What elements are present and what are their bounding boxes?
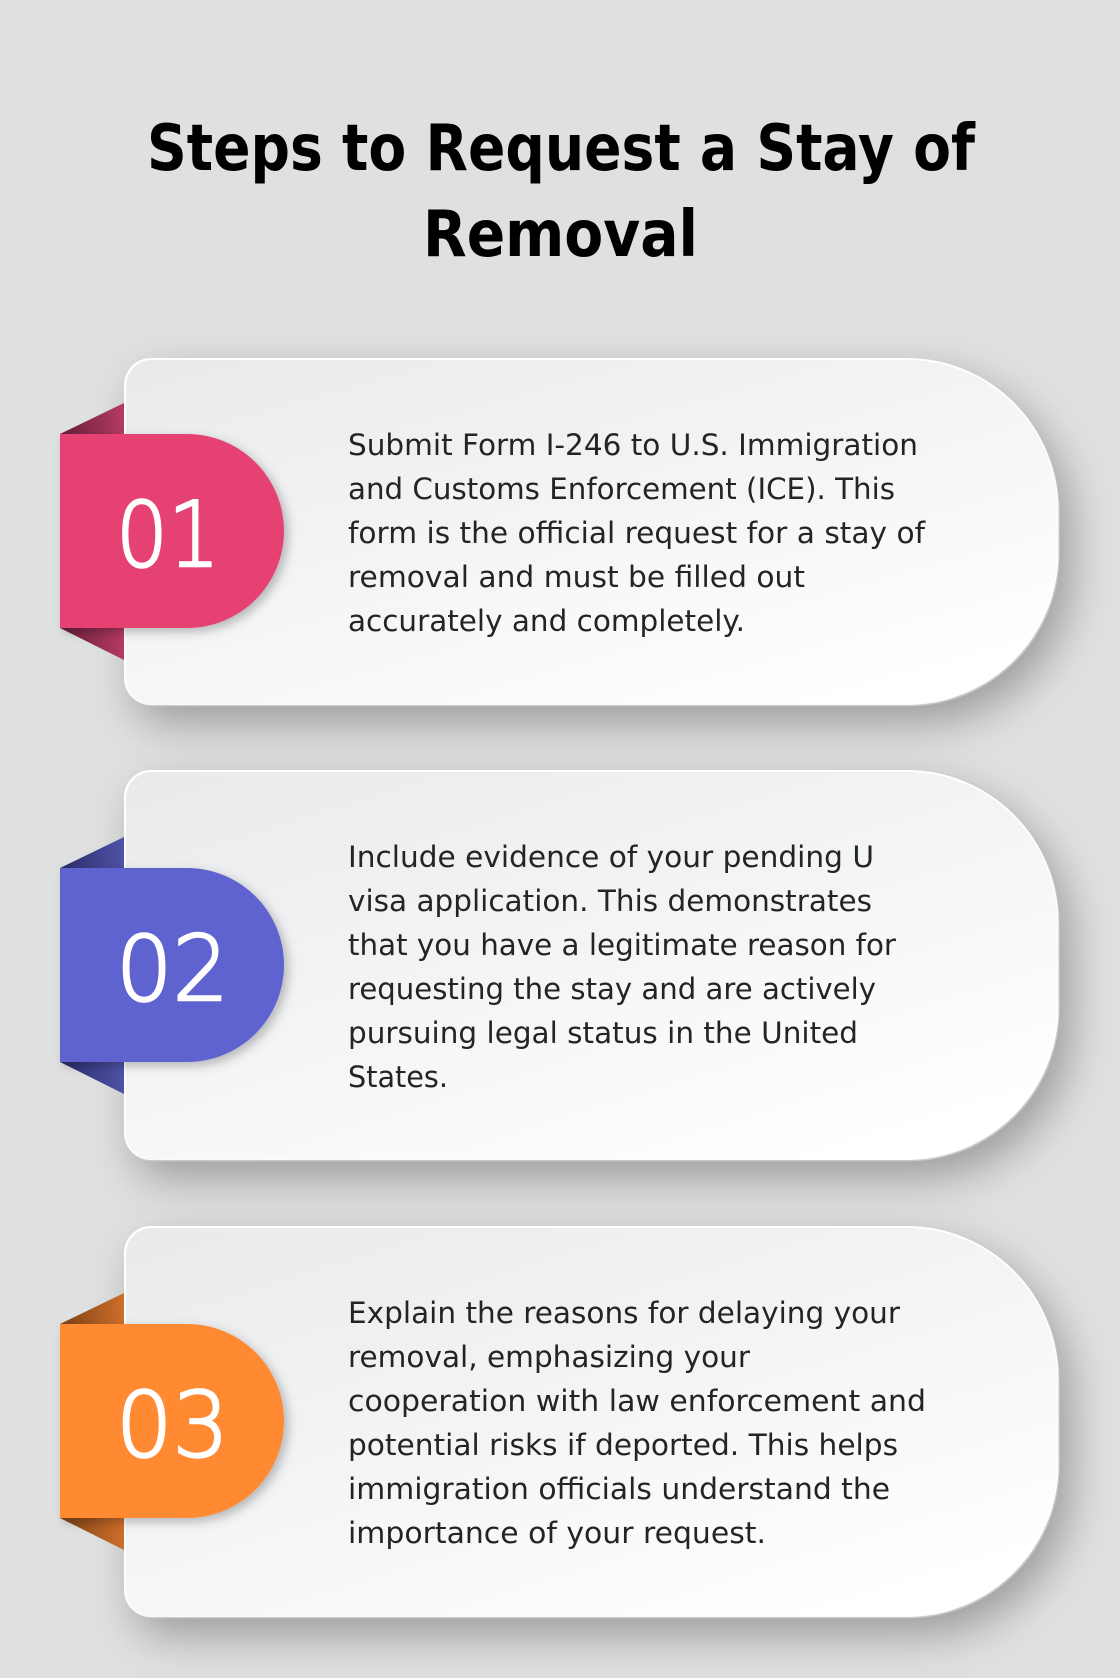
badge 02 [60,868,284,1062]
text block 2 [348,840,897,1094]
text block 2: Include evidence of your pending U [348,840,874,874]
text block 3 [348,1296,926,1550]
fold: bottom [60,628,124,660]
fold: top [60,837,124,868]
panel: step 1 [60,358,1060,706]
text block 1: and Customs Enforcement (ICE). This [348,472,895,506]
card 3 [124,1226,1060,1618]
text block 3: importance of your request. [348,1516,766,1550]
text block 1: Submit Form I-246 to U.S. Immigration [348,428,918,462]
panel: step 2 [60,770,1060,1161]
badge 03: 03 [116,1373,229,1478]
text block 3: immigration officials understand the [348,1472,890,1506]
text block 2: requesting the stay and are actively [348,972,876,1006]
card 1 [124,358,1060,706]
text block 2: that you have a legitimate reason for [348,928,897,962]
text block 3: cooperation with law enforcement and [348,1384,926,1418]
fold: top [60,403,124,434]
title [147,112,976,272]
text block 3: removal, emphasizing your [348,1340,751,1374]
text block 1: form is the official request for a stay of [348,516,926,550]
text block 1: removal and must be filled out [348,560,805,594]
title: Steps to Request a Stay of [147,112,976,186]
text block 1 [348,428,926,638]
text block 2: States. [348,1060,448,1094]
text block 3: Explain the reasons for delaying your [348,1296,901,1330]
fold: bottom [60,1518,124,1550]
fold: top [60,1293,124,1324]
panel: step 3 [60,1226,1060,1618]
text block 2: pursuing legal status in the United [348,1016,858,1050]
card 2 [124,770,1060,1161]
fold: bottom [60,1062,124,1094]
badge 03 [60,1324,284,1518]
text block 2: visa application. This demonstrates [348,884,872,918]
badge 02: 02 [116,917,229,1022]
text block 3: potential risks if deported. This helps [348,1428,898,1462]
badge 01: 01 [116,483,220,588]
text block 1: accurately and completely. [348,604,745,638]
title: Removal [423,198,698,272]
badge 01 [60,434,284,628]
